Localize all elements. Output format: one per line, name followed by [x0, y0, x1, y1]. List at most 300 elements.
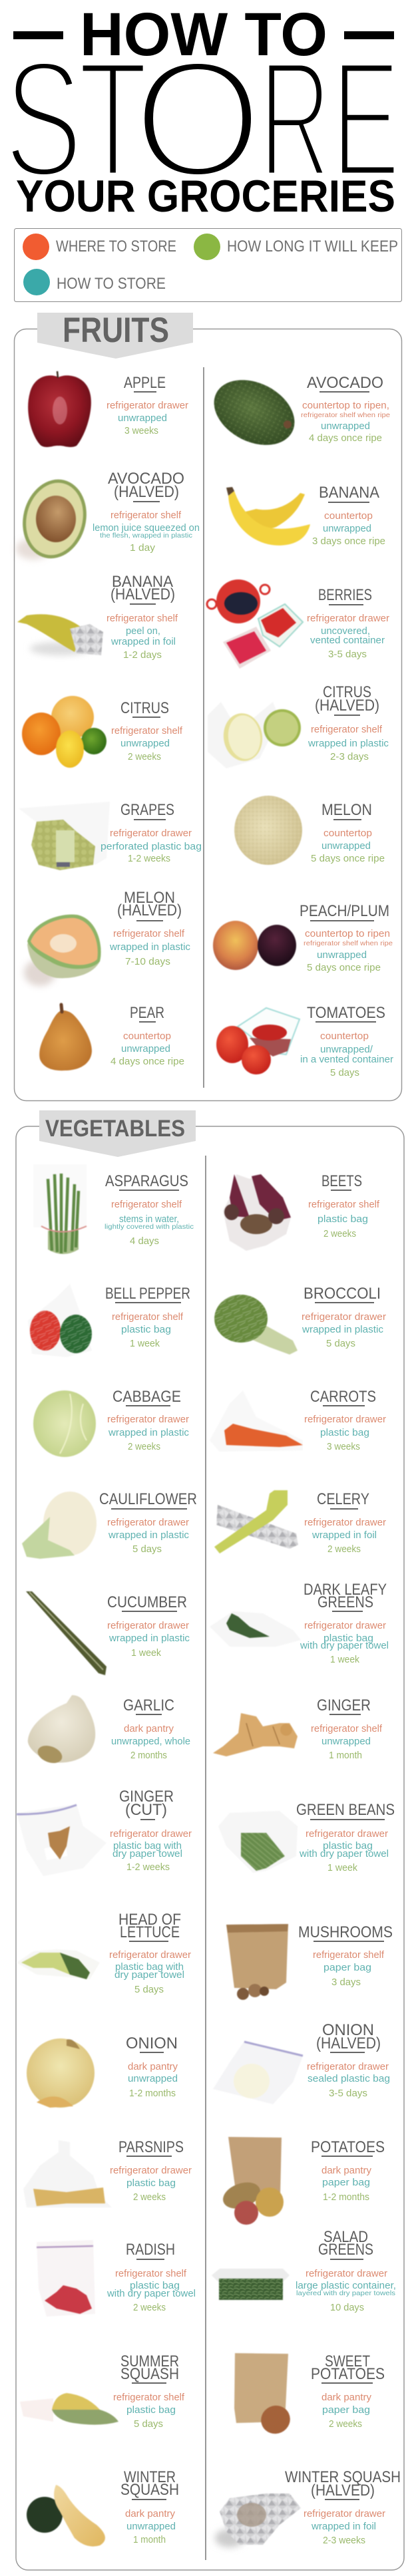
text: avocado halved: AVOCADO [108, 470, 184, 488]
text: ginger cut: plastic bag with [113, 1841, 182, 1852]
text: radish: with dry paper towel [106, 2289, 196, 2299]
text: apple [106, 374, 188, 436]
icon: avocado [203, 367, 306, 458]
text: asparagus [104, 1172, 194, 1247]
text: salad greens: large plastic container, [296, 2281, 396, 2291]
text: berries: 3-5 days [328, 649, 367, 660]
text: onion halved: 3-5 days [329, 2088, 367, 2099]
text: avocado halved [93, 470, 200, 554]
text: citrus: unwrapped [120, 738, 170, 749]
text: banana halved: peel on, [126, 626, 160, 637]
text: avocado: unwrapped [321, 421, 370, 432]
text: celery: 2 weeks [327, 1544, 361, 1555]
text: cucumber: wrapped in plastic [108, 1633, 190, 1644]
text: winter squash halved: refrigerator drawer [304, 2509, 385, 2519]
text: head of lettuce: HEAD OF [118, 1911, 181, 1929]
text: citrus halved [308, 683, 389, 762]
title word: STORE: S [4, 26, 83, 212]
text: head of lettuce: 5 days [134, 1985, 164, 1995]
item: celery [214, 1490, 386, 1555]
icon: ginger [213, 1713, 298, 1756]
text: melon: MELON [321, 801, 372, 819]
text: banana: 3 days once ripe [312, 536, 385, 547]
text: celery: wrapped in foil [312, 1530, 377, 1541]
text: peach and plum: countertop to ripen [305, 929, 390, 939]
text: ginger cut: refrigerator drawer [110, 1829, 192, 1840]
heading tab: fruits [37, 311, 193, 359]
text: sweet potatoes: paper bag [322, 2405, 370, 2416]
item: avocado [203, 367, 390, 458]
text: onion halved: (HALVED) [316, 2034, 381, 2052]
text: head of lettuce: plastic bag with [115, 1962, 184, 1973]
item: winter squash halved [215, 2468, 401, 2547]
text: grapes [101, 801, 202, 864]
text: radish [106, 2241, 196, 2313]
text: berries: uncovered, [321, 626, 370, 637]
item: potatoes [220, 2137, 385, 2225]
text: potatoes: POTATOES [311, 2138, 385, 2156]
text: cauliflower: CAULIFLOWER [99, 1490, 197, 1508]
text: tomatoes: in a vented container [300, 1054, 393, 1065]
text: winter squash halved: wrapped in foil [311, 2521, 376, 2532]
text: sweet potatoes: SWEET [325, 2352, 370, 2370]
heading tab: vegetables [39, 1110, 196, 1157]
item: parsnips [23, 2138, 192, 2207]
text: citrus halved: wrapped in plastic [308, 738, 389, 749]
item: mushrooms [226, 1923, 393, 2000]
text: radish: 2 weeks [133, 2303, 166, 2313]
text: summer squash: SQUASH [120, 2365, 179, 2383]
text: broccoli: refrigerator drawer [302, 1312, 386, 1323]
icon: winter squash [27, 2485, 105, 2547]
text: head of lettuce: LETTUCE [120, 1923, 180, 1941]
text: pear: countertop [123, 1031, 171, 1042]
text: sweet potatoes: 2 weeks [329, 2419, 362, 2430]
text: cucumber: CUCUMBER [107, 1593, 187, 1611]
icon: broccoli [214, 1295, 298, 1355]
text: potatoes: 1-2 months [323, 2192, 369, 2203]
item: banana [226, 484, 385, 547]
text: ginger cut [110, 1788, 192, 1873]
text: mushrooms [298, 1923, 393, 1988]
text: melon halved: MELON [124, 889, 175, 907]
text: melon halved: wrapped in plastic [109, 942, 190, 953]
text: pear: PEAR [130, 1004, 164, 1022]
text: parsnips: plastic bag [126, 2178, 176, 2189]
item: dark leafy greens [210, 1581, 389, 1665]
text: dark leafy greens [300, 1581, 389, 1665]
item: salad greens [212, 2228, 396, 2313]
text: green beans: GREEN BEANS [296, 1801, 395, 1819]
item: summer squash [20, 2352, 185, 2430]
icon: ginger cut [17, 1804, 106, 1876]
icon: apple [28, 371, 91, 447]
text: onion halved: ONION [322, 2021, 374, 2039]
item: bell pepper [28, 1284, 190, 1357]
text: cucumber [107, 1593, 190, 1659]
text: ginger: refrigerator shelf [311, 1724, 383, 1734]
item: sweet potatoes [234, 2352, 385, 2438]
text: banana halved: (HALVED) [110, 585, 175, 603]
text: ginger cut: dry paper towel [112, 1849, 182, 1859]
text: citrus: CITRUS [120, 699, 169, 717]
title word: STORE: R [259, 26, 331, 212]
text: summer squash [113, 2352, 185, 2430]
text: bell pepper: BELL PEPPER [105, 1285, 190, 1303]
text: sweet potatoes: dark pantry [321, 2392, 372, 2403]
text: avocado: countertop to ripen, [302, 401, 389, 411]
item: radish [37, 2240, 196, 2317]
text: mushrooms: MUSHROOMS [298, 1923, 393, 1941]
text: carrots: plastic bag [320, 1428, 369, 1438]
text: melon [311, 801, 385, 864]
text: ginger: 1 month [329, 1750, 362, 1761]
text: avocado [301, 374, 390, 444]
text: winter squash halved: 2-3 weeks [323, 2535, 365, 2546]
item: avocado halved [15, 470, 200, 565]
item: cabbage [33, 1388, 189, 1457]
text: celery: refrigerator drawer [304, 1518, 386, 1528]
text: radish: RADISH [126, 2241, 175, 2259]
icon: carrots [210, 1390, 303, 1452]
title word: STORE [4, 26, 400, 212]
text: tomatoes: unwrapped/ [320, 1045, 373, 1055]
item: citrus [22, 696, 183, 768]
text: pear: unwrapped [121, 1044, 170, 1054]
text: cauliflower [99, 1490, 197, 1555]
icon: berries [207, 579, 303, 669]
icon: asparagus [33, 1164, 87, 1254]
text: apple: 3 weeks [124, 426, 158, 436]
text: garlic: GARLIC [123, 1696, 174, 1714]
text: onion: dark pantry [128, 2062, 178, 2072]
text: dark leafy greens: refrigerator drawer [304, 1621, 386, 1631]
text: parsnips: refrigerator drawer [110, 2166, 192, 2176]
text: berries: BERRIES [318, 586, 372, 604]
text: garlic: dark pantry [124, 1724, 174, 1734]
text: potatoes [311, 2138, 385, 2203]
item: green beans [218, 1801, 395, 1873]
item: beets [223, 1172, 380, 1251]
text: carrots: refrigerator drawer [304, 1414, 386, 1425]
item: melon [234, 796, 385, 865]
item: ginger cut [17, 1788, 192, 1876]
text: cucumber: 1 week [131, 1648, 162, 1659]
text: head of lettuce: dry paper towel [114, 1970, 184, 1981]
text: banana: unwrapped [323, 524, 371, 534]
text: apple: refrigerator drawer [106, 401, 188, 411]
icon: garlic [28, 1695, 95, 1766]
text: head of lettuce: refrigerator drawer [109, 1950, 191, 1961]
text: potatoes: dark pantry [321, 2166, 372, 2176]
text: broccoli: 5 days [326, 1339, 355, 1349]
text: ginger [311, 1696, 383, 1761]
text: peach and plum: PEACH/PLUM [300, 902, 389, 920]
text: bell pepper: plastic bag [121, 1325, 171, 1335]
item: ginger [213, 1696, 383, 1761]
text: berries: refrigerator drawer [307, 613, 389, 624]
text: dark leafy greens: DARK LEAFY [304, 1581, 387, 1599]
text: radish: refrigerator shelf [115, 2269, 187, 2279]
icon: beets [223, 1174, 291, 1251]
item: pear [39, 1004, 184, 1070]
text: onion halved: sealed plastic bag [308, 2074, 390, 2084]
text: ginger: unwrapped [321, 1736, 371, 1747]
text: apple: unwrapped [118, 413, 167, 424]
text: peach and plum: unwrapped [317, 950, 367, 961]
text: winter squash halved: (HALVED) [311, 2482, 375, 2499]
item: banana halved [17, 573, 178, 661]
text: dark leafy greens: 1 week [330, 1655, 360, 1665]
item: garlic [28, 1695, 190, 1766]
text: carrots [304, 1388, 386, 1452]
text: winter squash: 1 month [133, 2535, 166, 2545]
item: broccoli [214, 1285, 386, 1355]
item: melon halved [24, 889, 190, 986]
text: banana halved [106, 573, 178, 661]
icon: melon [234, 796, 302, 865]
text: sweet potatoes [311, 2352, 385, 2430]
text: broccoli: BROCCOLI [304, 1285, 381, 1303]
text: onion: ONION [126, 2034, 178, 2052]
text: summer squash: refrigerator shelf [113, 2392, 185, 2403]
text: citrus halved: (HALVED) [315, 697, 379, 715]
text: cabbage: refrigerator drawer [107, 1414, 189, 1425]
text: parsnips: 2 weeks [133, 2192, 166, 2203]
item: tomatoes [216, 1004, 393, 1078]
text: ginger cut: (CUT) [125, 1801, 167, 1819]
text: apple: APPLE [124, 374, 166, 392]
text: winter squash [120, 2468, 179, 2545]
text: avocado halved: 1 day [130, 543, 156, 554]
text: onion: 1-2 months [129, 2088, 176, 2099]
text: banana [312, 484, 385, 547]
title lines: how to, your groceries [13, 1, 395, 220]
text: melon: 5 days once ripe [311, 854, 385, 864]
text: mushrooms: paper bag [323, 1963, 371, 1973]
text: avocado: AVOCADO [307, 374, 383, 392]
text: banana halved: 1-2 days [123, 650, 162, 661]
text: tomatoes: TOMATOES [307, 1004, 385, 1022]
item: head of lettuce [17, 1911, 191, 1995]
icon: green beans [218, 1811, 298, 1873]
item: onion [27, 2034, 178, 2108]
icon: salad greens [212, 2269, 290, 2300]
text: garlic: unwrapped, whole [111, 1736, 190, 1747]
text: winter squash halved: WINTER SQUASH [285, 2468, 401, 2486]
text: citrus halved: 2-3 days [330, 752, 369, 762]
icon: bell pepper [28, 1284, 92, 1357]
icon: cabbage [33, 1390, 96, 1457]
icon: citrus [22, 696, 106, 768]
text: tomatoes: 5 days [330, 1068, 359, 1078]
legend box [15, 229, 402, 302]
icon: radish [37, 2240, 95, 2317]
text: berries: vented container [310, 635, 385, 646]
title lines: how to, your groceries: HOW TO [80, 1, 327, 69]
text: parsnips: PARSNIPS [118, 2138, 184, 2156]
panel: fruits [15, 311, 402, 1100]
title word: STORE: E [331, 26, 400, 212]
text: beets: plastic bag [317, 1214, 368, 1225]
text: garlic: 2 months [130, 1750, 167, 1761]
text: cauliflower: wrapped in plastic [108, 1530, 189, 1541]
text: berries [307, 586, 389, 660]
text: green beans: 1 week [327, 1863, 358, 1873]
item: cucumber [26, 1591, 190, 1675]
icon: mushrooms [226, 1924, 288, 2000]
text: salad greens: GREENS [318, 2241, 373, 2259]
icon: potatoes [220, 2137, 284, 2225]
item: grapes [19, 801, 202, 870]
text: winter squash: dark pantry [125, 2509, 176, 2519]
text: ginger cut: GINGER [119, 1788, 174, 1806]
text: garlic [111, 1696, 190, 1761]
text: banana: BANANA [319, 484, 379, 502]
text: broccoli [302, 1285, 386, 1349]
legend: how long it will keep [194, 234, 398, 260]
text: asparagus: refrigerator shelf [111, 1200, 182, 1210]
heading tab: vegetables: VEGETABLES [45, 1116, 185, 1142]
text: asparagus: ASPARAGUS [105, 1172, 188, 1190]
text: avocado halved: refrigerator shelf [110, 510, 182, 521]
text: cauliflower: refrigerator drawer [107, 1518, 189, 1528]
icon: tomatoes [216, 1008, 300, 1074]
text: green beans [296, 1801, 395, 1873]
item: apple [28, 371, 188, 447]
text: beets [308, 1172, 380, 1239]
text: winter squash: unwrapped [126, 2521, 176, 2532]
text: broccoli: wrapped in plastic [302, 1325, 383, 1335]
text: cabbage [107, 1388, 189, 1452]
text: asparagus: 4 days [130, 1236, 159, 1247]
text: tomatoes [300, 1004, 393, 1078]
text: citrus: refrigerator shelf [111, 726, 183, 736]
icon: melon halved [24, 915, 101, 986]
text: beets: BEETS [321, 1172, 362, 1190]
text: sweet potatoes: POTATOES [311, 2365, 385, 2383]
text: carrots: 3 weeks [327, 1442, 360, 1452]
icon: head of lettuce [17, 1949, 100, 1979]
text: dark leafy greens: plastic bag [323, 1633, 373, 1644]
text: radish: plastic bag [130, 2281, 180, 2291]
icon: cauliflower [22, 1492, 97, 1559]
text: winter squash: WINTER [124, 2468, 176, 2486]
item: carrots [210, 1388, 386, 1452]
text: peach and plum [300, 902, 393, 973]
text: celery: CELERY [317, 1490, 369, 1508]
text: dark leafy greens: GREENS [317, 1593, 373, 1611]
text: winter squash: SQUASH [120, 2481, 179, 2499]
text: onion: unwrapped [128, 2074, 178, 2084]
text: cabbage: 2 weeks [128, 1442, 160, 1452]
text: potatoes: paper bag [322, 2177, 370, 2188]
text: ginger: GINGER [317, 1696, 371, 1714]
text: green beans: plastic bag [323, 1841, 373, 1852]
text: beets: refrigerator shelf [308, 1200, 380, 1210]
text: mushrooms: 3 days [331, 1977, 361, 1988]
text: avocado halved: (HALVED) [114, 483, 179, 501]
text: dark leafy greens: with dry paper towel [300, 1641, 389, 1651]
item: cauliflower [22, 1490, 197, 1559]
text: citrus halved: CITRUS [323, 683, 371, 701]
text: peach and plum: refrigerator shelf when ripe [304, 939, 393, 947]
text: melon halved: 7-10 days [125, 957, 170, 967]
text: bell pepper: 1 week [130, 1339, 160, 1349]
text: grapes: perforated plastic bag [101, 842, 202, 852]
icon: onion halved [213, 2041, 303, 2104]
title [4, 1, 400, 220]
text: tomatoes: countertop [320, 1031, 369, 1042]
text: bell pepper [105, 1285, 190, 1349]
icon: banana [226, 487, 310, 546]
icon: cucumber [26, 1591, 106, 1675]
title word: STORE: O [133, 26, 262, 212]
item: peach and plum [213, 902, 393, 973]
text: beets: 2 weeks [323, 1229, 356, 1239]
text: citrus [111, 699, 183, 762]
text: salad greens: SALAD [323, 2228, 368, 2246]
text: peach and plum: 5 days once ripe [307, 963, 381, 973]
text: salad greens [296, 2228, 396, 2313]
icon: celery [214, 1490, 298, 1553]
heading tab: fruits: FRUITS [63, 311, 169, 350]
text: banana halved: refrigerator shelf [106, 613, 178, 624]
text: parsnips [110, 2138, 192, 2203]
text: pear [110, 1004, 184, 1067]
text: avocado: 4 days once ripe [309, 433, 382, 444]
text: cabbage: CABBAGE [112, 1388, 181, 1406]
legend: where to store: WHERE TO STORE [56, 238, 176, 255]
text: head of lettuce [109, 1911, 191, 1995]
text: melon halved: (HALVED) [117, 901, 182, 919]
legend: where to store [23, 234, 176, 260]
text: melon: countertop [323, 828, 372, 839]
legend: how to store [23, 269, 166, 295]
text: summer squash: SUMMER [120, 2352, 179, 2370]
title word: STORE: T [78, 26, 148, 212]
text: melon: unwrapped [321, 841, 371, 852]
text: citrus halved: refrigerator shelf [311, 724, 383, 735]
item: onion halved [213, 2021, 390, 2104]
text: summer squash: plastic bag [126, 2405, 176, 2416]
text: avocado halved: the flesh, wrapped in plastic [100, 532, 192, 540]
icon: winter squash halved [215, 2494, 301, 2547]
icon: onion [27, 2038, 95, 2108]
text: avocado: refrigerator shelf when ripe [301, 411, 390, 419]
text: grapes: refrigerator drawer [110, 828, 192, 839]
item: citrus halved [208, 683, 389, 768]
text: grapes: GRAPES [120, 801, 174, 819]
text: banana: countertop [324, 511, 373, 522]
text: onion [126, 2034, 178, 2099]
text: summer squash: 5 days [134, 2419, 163, 2430]
legend: how to store: HOW TO STORE [57, 275, 166, 293]
text: cucumber: refrigerator drawer [107, 1621, 189, 1631]
text: cauliflower: 5 days [132, 1544, 162, 1555]
text: grapes: 1-2 weeks [128, 854, 170, 864]
text: citrus: 2 weeks [128, 752, 161, 762]
text: mushrooms: refrigerator shelf [313, 1950, 385, 1961]
icon: sweet potatoes [234, 2353, 295, 2438]
text: winter squash halved [285, 2468, 401, 2546]
text: avocado halved: lemon juice squeezed on [93, 523, 200, 534]
text: cabbage: wrapped in plastic [108, 1428, 189, 1438]
icon: pear [39, 1005, 92, 1070]
icon: parsnips [23, 2140, 112, 2207]
text: ginger cut: 1-2 weeks [126, 1862, 170, 1873]
text: onion halved: refrigerator drawer [307, 2062, 389, 2072]
